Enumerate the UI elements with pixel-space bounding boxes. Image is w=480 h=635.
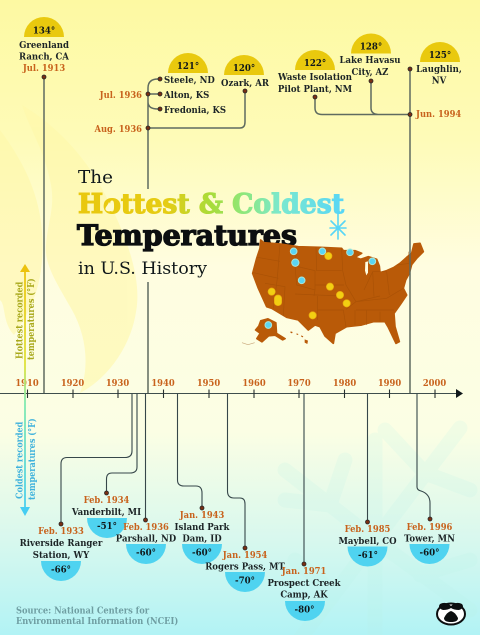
Aleutian islands <box>242 343 255 345</box>
cold record locations <box>265 248 376 328</box>
record: Prospect Creek Camp, AK: Camp, AK <box>280 590 328 600</box>
record: Tower, MN <box>404 517 455 564</box>
hot records <box>19 17 462 135</box>
decade labels: 1960 <box>242 378 266 389</box>
record: Steele, Alton and Fredonia: Jul. 1936 <box>99 90 142 101</box>
label: coldest recorded temperatures: temperatures (°F) <box>27 418 38 500</box>
record: Steele, Alton and Fredonia: Fredonia, KS <box>164 105 226 116</box>
axis arrow <box>456 389 463 398</box>
record: Riverside Ranger Station, WY <box>20 522 103 581</box>
decade labels: 1930 <box>106 378 129 389</box>
logo <box>437 603 465 624</box>
record: Greenland Ranch, CA: Ranch, CA <box>19 52 69 62</box>
record: Rogers Pass, MT: -70° <box>235 576 255 586</box>
decade labels: 2000 <box>423 378 446 389</box>
label: hottest recorded temperatures: temperatures (°F) <box>26 278 37 360</box>
record: Lake Havasu City, AZ <box>339 34 401 83</box>
record: Vanderbilt, MI: Vanderbilt, MI <box>71 507 141 518</box>
record: Parshall, ND: Feb. 1936 <box>123 522 169 533</box>
record: Greenland Ranch, CA: Greenland <box>19 40 69 51</box>
record: Riverside Ranger Station, WY: -66° <box>51 564 71 576</box>
axis ticks <box>28 390 435 398</box>
record: Vanderbilt, MI: -51° <box>97 521 117 532</box>
great lake <box>365 261 368 275</box>
record: Laughlin, NV: NV <box>432 76 447 86</box>
cold connector lines <box>61 394 430 564</box>
title line: The: The <box>78 167 113 188</box>
record: Rogers Pass, MT: Rogers Pass, MT <box>205 562 285 572</box>
record: Waste Isolation Pilot Plant, NM: 122° <box>304 58 326 69</box>
record: Maybell, CO <box>338 520 397 566</box>
decade labels: 1910 <box>15 378 39 389</box>
record: Tower, MN: -60° <box>420 548 439 558</box>
decade labels: 1970 <box>287 378 311 389</box>
record: Lake Havasu City, AZ: City, AZ <box>352 67 388 78</box>
record: Ozark, AR: 120° <box>233 63 255 74</box>
record: Greenland Ranch, CA: Jul. 1913 <box>22 63 65 74</box>
record: Riverside Ranger Station, WY: Station, WY <box>33 550 90 561</box>
record: Rogers Pass, MT: Jan. 1954 <box>222 550 267 561</box>
record: Tower, MN: Feb. 1996 <box>407 522 453 533</box>
icon: hanging snowflake <box>330 212 346 239</box>
label: hottest recorded temperatures: Hottest recorded <box>16 281 26 359</box>
hot connector lines <box>44 69 410 393</box>
contiguous states <box>253 240 423 343</box>
axis arrow: hot up and cold down <box>20 264 30 516</box>
map of the United States <box>242 240 423 345</box>
record: Steele, Alton and Fredonia <box>99 53 226 116</box>
decorative flame <box>0 105 137 393</box>
record: Island Park Dam, ID: Jan. 1943 <box>179 510 224 521</box>
arrowhead: hot <box>20 264 30 272</box>
arrowhead: cold <box>20 507 30 516</box>
record: Ozark, AR: Aug. 1936 <box>93 124 142 135</box>
state borders <box>253 244 410 327</box>
decade labels: 1980 <box>333 378 356 389</box>
record: Steele, Alton and Fredonia: Alton, KS <box>163 90 209 101</box>
title line: Temperatures: Temperatures <box>77 219 297 252</box>
record: Steele, Alton and Fredonia: Steele, ND <box>164 75 215 86</box>
decade labels <box>15 378 446 389</box>
record: Vanderbilt, MI <box>71 491 141 538</box>
record: Prospect Creek Camp, AK <box>267 562 342 621</box>
record: Maybell, CO: Maybell, CO <box>338 536 397 547</box>
timeline axis <box>0 378 463 398</box>
title line: in U.S. History: in U.S. History <box>78 259 208 278</box>
Hawaii <box>290 331 308 344</box>
record: Lake Havasu City, AZ: 128° <box>360 42 382 52</box>
decorative snowflake <box>285 428 470 635</box>
record: Laughlin, NV: 125° <box>429 50 451 61</box>
record: Parshall, ND: -60° <box>136 548 156 558</box>
cold records <box>20 491 455 621</box>
decade labels: 1950 <box>197 378 220 389</box>
hot record locations <box>268 252 350 319</box>
decade labels: 1940 <box>151 378 175 389</box>
decade labels: 1920 <box>61 378 84 389</box>
label: hottest recorded temperatures <box>16 278 37 360</box>
label: coldest recorded temperatures <box>16 418 38 500</box>
Alaska <box>255 319 285 342</box>
record: Steele, Alton and Fredonia: 121° <box>177 61 199 72</box>
label: coldest recorded temperatures: Coldest recorded <box>16 421 26 499</box>
decade labels: 1990 <box>378 378 401 389</box>
source note: Environmental Information (NCEI) <box>16 616 178 627</box>
record: Parshall, ND <box>116 518 177 564</box>
record: Ozark, AR <box>93 55 270 135</box>
record: Waste Isolation Pilot Plant, NM: Pilot Plant, NM <box>278 84 353 95</box>
record: Prospect Creek Camp, AK: Jan. 1971 <box>281 566 326 577</box>
record: Laughlin, NV: Laughlin, <box>416 64 462 75</box>
record: Riverside Ranger Station, WY: Feb. 1933 <box>38 526 84 537</box>
record: Greenland Ranch, CA <box>19 17 69 79</box>
title line: Hottest and Coldest: Hottest & Coldest <box>78 188 345 220</box>
record: Waste Isolation Pilot Plant, NM: Waste Isolation <box>277 72 353 83</box>
record: Rogers Pass, MT <box>205 546 285 592</box>
record: Prospect Creek Camp, AK: Prospect Creek <box>267 578 342 589</box>
record: Lake Havasu City, AZ: Lake Havasu <box>339 55 401 66</box>
title <box>77 167 346 278</box>
record: Island Park Dam, ID: Dam, ID <box>182 534 222 544</box>
record: Island Park Dam, ID <box>175 506 231 564</box>
record: Vanderbilt, MI: Feb. 1934 <box>84 495 130 506</box>
record: Tower, MN: Tower, MN <box>404 534 455 544</box>
source note: Source: National Centers for <box>16 606 150 616</box>
record: Laughlin, NV <box>408 42 462 120</box>
record: Island Park Dam, ID: Island Park <box>175 522 231 533</box>
record: Waste Isolation Pilot Plant, NM <box>277 50 353 99</box>
record: Riverside Ranger Station, WY: Riverside Ranger <box>20 538 103 549</box>
source note <box>16 606 178 627</box>
record: Island Park Dam, ID: -60° <box>192 548 212 558</box>
record: Prospect Creek Camp, AK: -80° <box>295 604 314 616</box>
record: Ozark, AR: Ozark, AR <box>221 78 270 89</box>
record: Maybell, CO: Feb. 1985 <box>345 524 391 535</box>
record: Greenland Ranch, CA: 134° <box>33 26 55 36</box>
icon: flame in the letter o <box>105 202 113 211</box>
record: Laughlin, NV: Jun. 1994 <box>415 109 461 120</box>
record: Maybell, CO: -61° <box>358 550 378 561</box>
record: Parshall, ND: Parshall, ND <box>116 534 177 544</box>
